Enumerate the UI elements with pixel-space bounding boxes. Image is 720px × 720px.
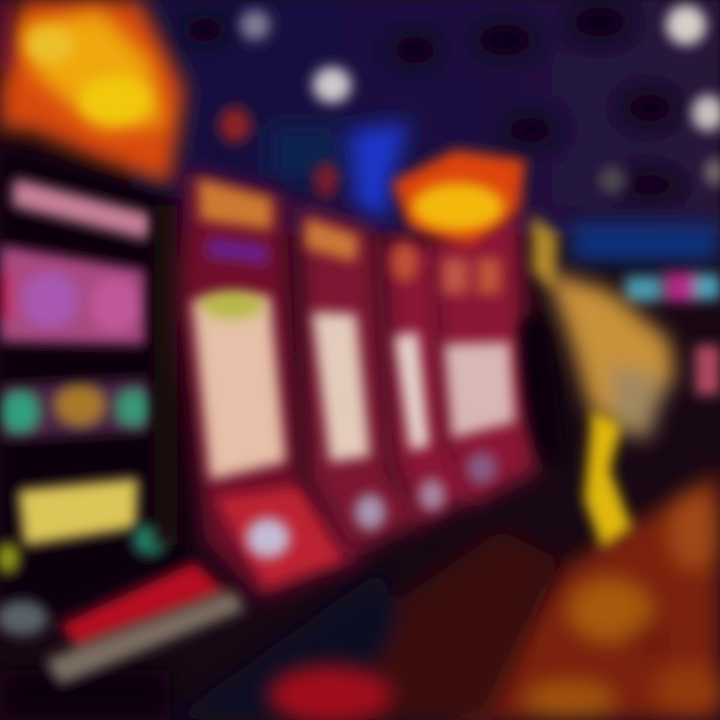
top pink panel [12, 178, 150, 240]
machine 2 screen [192, 296, 286, 480]
machine 3 [298, 162, 425, 555]
reel panel [0, 245, 145, 345]
blue glow behind machines [270, 122, 720, 262]
gold figure decoration [545, 270, 675, 440]
machine 5 with orange topper [392, 150, 540, 505]
side column [155, 205, 177, 545]
machine 3 screen [312, 312, 370, 462]
ceiling lights [240, 5, 720, 194]
left top sign [0, 0, 185, 185]
machine 5 screen [444, 342, 515, 438]
symbol row [0, 378, 150, 440]
left slot machine cabinet [0, 145, 190, 640]
ceiling dark spots [181, 3, 682, 199]
yellow side panel [532, 215, 558, 290]
ceiling [130, 0, 720, 235]
dark arc end panel [520, 315, 565, 465]
left machine red deck [0, 562, 245, 685]
yellow panel [18, 478, 138, 546]
aisle and machine bases [0, 530, 560, 720]
floor carpet [450, 470, 720, 720]
red stool [268, 665, 392, 720]
machine 4 [382, 235, 485, 525]
machine 2 [178, 107, 365, 600]
right neon strip [625, 272, 720, 395]
